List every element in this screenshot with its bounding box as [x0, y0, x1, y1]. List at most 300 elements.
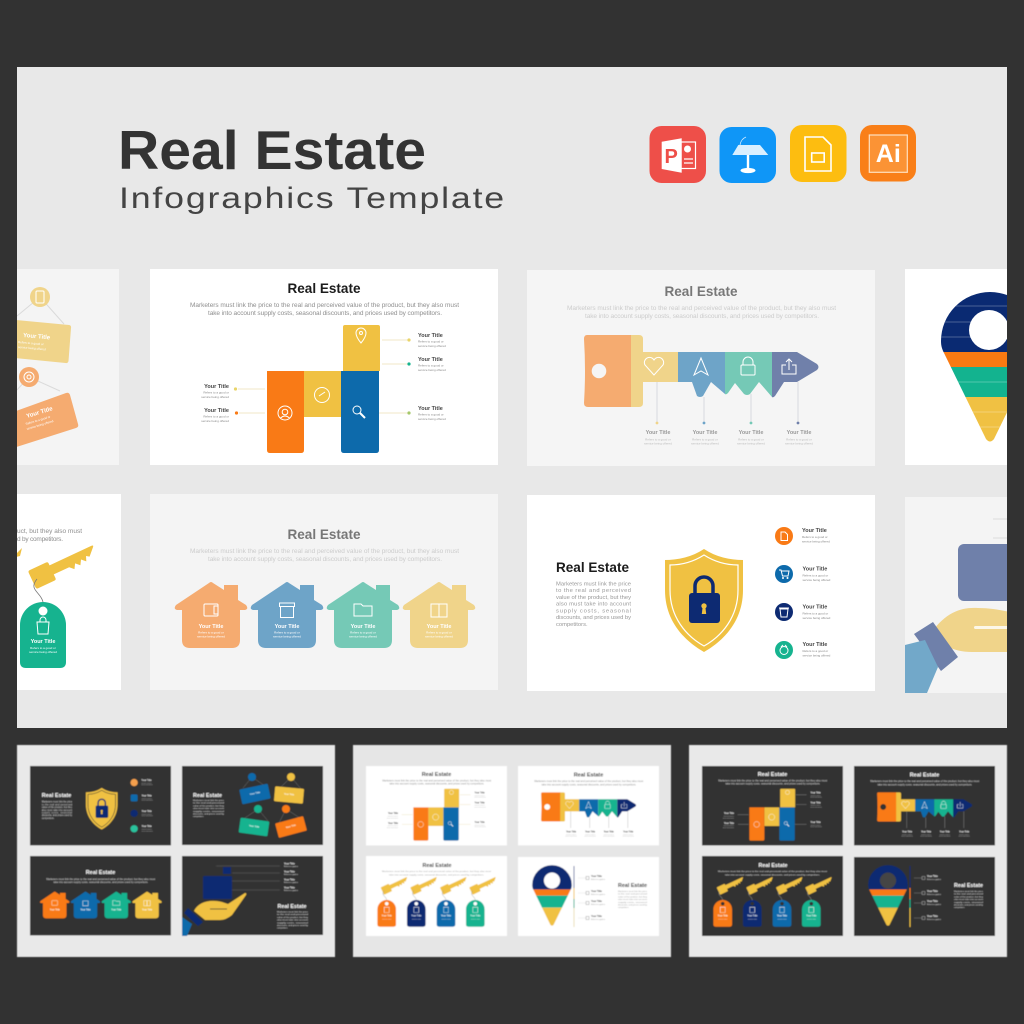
mini slide: key tags dark: take into account supply costs, seasonal discounts, and prices used by competitors.: [725, 873, 821, 876]
description: Marketers must link the price to the real and perceived value of the product, but they also must: [567, 305, 836, 312]
chart: striped pin: [941, 292, 1007, 442]
panel: dark slides group: [17, 745, 335, 957]
mini slide: pin light: supply costs, seasonal: [618, 901, 648, 904]
mini slide: key tags light: Your Title: [441, 915, 452, 918]
item: orange: Your Title: [802, 528, 827, 534]
icon: gauge: [314, 388, 330, 402]
mini slide: houses dark: take into account supply costs, seasonal discounts, and prices used by competitors.: [53, 880, 149, 884]
house: orange: [175, 582, 247, 648]
label: right middle: [418, 357, 446, 372]
mini slide: blocks light: Refers to a good or: [388, 814, 399, 817]
heading: Real Estate: [288, 280, 361, 296]
description: discounts, and prices used by: [556, 615, 631, 621]
mini slide: key dark: Your Title: [940, 830, 951, 833]
item: navy: Refers to a good or: [802, 612, 828, 616]
mini slide: shield dark: Marketers must link the price: [42, 801, 73, 804]
panel: partial slide with hanging signs: [17, 269, 119, 465]
icon: user: [278, 406, 292, 420]
sign: orange: service being offered: [26, 419, 54, 431]
key: [28, 546, 94, 588]
icon: PowerPoint: P: [664, 146, 678, 168]
mini slide: blocks light: [366, 766, 507, 845]
mini slide: blocks light: Real Estate: [422, 772, 451, 778]
item: navy: service being offered: [802, 616, 831, 620]
description fragment: d by competitors.: [17, 536, 63, 543]
mini slide: hand dark: Your Title: [284, 878, 295, 882]
mini slide: key tags dark: Refers to a good: [807, 917, 816, 920]
label: right top: Refers to a good or: [418, 340, 444, 344]
description: value of the product, but they: [556, 595, 631, 601]
mini slide: pin dark: competitors.: [954, 906, 965, 909]
mini slide: shield dark: value of the product, but they: [42, 806, 73, 809]
mini slide: blocks light: service being offered: [475, 805, 486, 808]
sign: orange: Refers to a good or: [25, 415, 51, 426]
house: orange: service being offered: [197, 634, 225, 638]
labels: Your Title: [787, 430, 811, 436]
panel: partial slide with key tag: [12, 494, 121, 690]
mini slide: key tags light: Refers to a good: [382, 917, 391, 920]
label: left top: [201, 384, 229, 399]
tag text: [29, 639, 57, 654]
description: [556, 582, 631, 628]
sign: yellow: service being offered: [18, 345, 46, 351]
mini slide: blocks dark: take into account supply costs, seasonal discounts, and prices used by competitors.: [725, 782, 821, 786]
mini slide: pin light: Marketers must link the price: [618, 890, 648, 893]
label: right middle: Your Title: [418, 357, 443, 363]
block: yellow middle: [304, 371, 341, 417]
labels: Your Title: [693, 430, 717, 436]
mini slide: key tags light: Your Title: [411, 915, 422, 918]
mini slide: key dark: Refers to a good or: [940, 833, 950, 836]
mini slide: signs dark: Marketers must link the price: [193, 799, 225, 802]
mini slide: key dark: Your Title: [902, 830, 913, 833]
labels: Your Title: [739, 430, 763, 436]
mini slide: shield dark: Your Title: [142, 810, 152, 813]
mini slide: key light: Your Title: [604, 830, 615, 833]
icon: PowerPoint: [650, 126, 706, 183]
house: teal: [327, 582, 399, 648]
mini slide: shield dark: Refers to a good or: [142, 812, 153, 815]
mini slide: houses dark: Your Title: [142, 908, 153, 911]
mini slide: houses dark: Your Title: [50, 908, 60, 911]
mini slide: hand dark: Marketers must link the price: [277, 910, 309, 914]
mini slide: pin dark: Refers to a good or: [927, 903, 941, 906]
description: supply costs, seasonal: [556, 608, 631, 614]
mini slide: hand dark: Your Title: [284, 870, 295, 874]
mini slide: hand dark: discounts, and prices used by: [277, 924, 308, 927]
mini slide: signs dark: also must take into account: [193, 807, 225, 810]
mini slide: signs dark: Your Title: [285, 824, 297, 829]
mini slide: blocks dark: Your Title: [811, 821, 821, 824]
mini slide: blocks dark: service being offered: [723, 816, 734, 819]
labels: Refers to a good or: [786, 438, 812, 442]
icon: Keynote: [720, 127, 776, 183]
mini slide: blocks dark: Marketers must link the price to the real and perceived value of the product, but they also must: [718, 778, 827, 782]
panel: partial slide with hand: [905, 497, 1007, 693]
mini slide: shield dark: Your Title: [141, 779, 152, 782]
house: yellow: Your Title: [427, 624, 451, 630]
mini slide: signs dark: competitors.: [193, 815, 204, 818]
mini slide: pin dark: Your Title: [927, 875, 938, 878]
description: Marketers must link the price to the real and perceived value of the product, but they also must: [190, 302, 459, 309]
icon: padlock: [689, 577, 720, 623]
mini slide: pin dark: Refers to a good or: [927, 878, 941, 881]
sign: orange: Your Title: [26, 406, 54, 420]
mini slide: blocks light: service being offered: [475, 825, 486, 828]
block: blue: [341, 371, 379, 453]
item: blue: [775, 565, 831, 583]
icon: lock: [741, 357, 755, 375]
mini slide: houses dark: Your Title: [80, 908, 91, 911]
mini slide: hand dark: also must take into account: [277, 919, 309, 922]
house: blue: Your Title: [275, 624, 299, 630]
mini slide: key tags dark: [702, 856, 843, 936]
mini slide: signs dark: Real Estate: [193, 793, 222, 799]
mini slide: pin dark: Marketers must link the price: [954, 890, 984, 893]
cuff: [914, 622, 958, 671]
mini slide: shield dark: discounts, and prices used by: [42, 814, 73, 817]
mini slide: blocks light: Refers to a good or: [475, 823, 485, 826]
mini slide: key tags light: Refers to a good: [442, 917, 451, 920]
labels: Your Title: [646, 430, 670, 436]
description: Marketers must link the price: [556, 582, 631, 588]
description: take into account supply costs, seasonal discounts, and prices used by competitors.: [585, 313, 819, 320]
icon: navigation: [694, 358, 708, 375]
icon: Illustrator: Ai: [876, 140, 901, 168]
mini slide: pin light: Your Title: [591, 890, 602, 893]
mini slide: blocks light: take into account supply costs, seasonal discounts, and prices used by competitors.: [389, 782, 485, 786]
mini slide: pin light: competitors.: [618, 906, 629, 909]
mini slide: key dark: [854, 766, 995, 845]
mini slide: pin dark: Refers to a good or: [927, 893, 941, 896]
mini slide: key light: Refers to a good or: [604, 833, 614, 836]
icon: previous key fragment: [17, 548, 22, 557]
mini slide: key light: service being offered: [566, 835, 577, 838]
heading: Real Estate: [556, 559, 629, 575]
mini slide: key light: take into account supply costs, seasonal discounts, and prices used by competitors.: [542, 782, 637, 786]
mini slide: pin light: also must take into account: [618, 898, 648, 901]
mini slide: key tags dark: Refers to a good: [778, 917, 787, 920]
block: orange: [267, 371, 304, 453]
mini slide: key tags dark: Refers to a good: [748, 917, 757, 920]
mini slide: blocks dark: Your Title: [724, 822, 735, 825]
item: orange: [775, 527, 830, 545]
mini slide: hand dark: competitors.: [277, 927, 288, 930]
sign: yellow: [17, 320, 72, 364]
mini slide: pin dark: Real Estate: [954, 883, 983, 889]
callout dots: [234, 338, 411, 415]
mini slide: signs dark: supply costs, seasonal: [193, 810, 225, 813]
mini slide: blocks dark: service being offered: [811, 796, 822, 799]
mini slide: blocks light: Refers to a good or: [475, 794, 485, 797]
mini slide: hand dark: to the real and perceived: [277, 913, 308, 916]
mini slide: signs dark: Your Title: [249, 824, 260, 829]
mini slide: key light: service being offered: [623, 835, 634, 838]
description: [190, 302, 459, 317]
tag hole: [38, 606, 48, 616]
mini slide: houses dark: Real Estate: [86, 870, 115, 876]
labels: service being offered: [644, 442, 672, 446]
mini slide: blocks light: Your Title: [475, 792, 485, 795]
description: to the real and perceived: [556, 588, 631, 594]
mini slide: shield dark: Refers to a good or: [142, 828, 153, 831]
mini slide: pin light: Refers to a good or: [591, 903, 605, 906]
mini slide: hand dark: Your Title: [284, 862, 295, 866]
mini slide: key dark: Refers to a good or: [959, 833, 970, 836]
mini slide: houses dark: [30, 856, 171, 935]
key tag: [20, 546, 94, 668]
mini slide: blocks dark: Refers to a good or: [811, 804, 821, 807]
label: left top: Your Title: [204, 384, 229, 390]
mini slide: pin light: [518, 857, 659, 936]
mini slide: blocks dark: service being offered: [723, 826, 734, 829]
description: competitors.: [556, 622, 588, 628]
item: green: Refers to a good or: [802, 649, 828, 653]
house: teal: service being offered: [349, 634, 377, 638]
mini slide: pin dark: supply costs, seasonal: [954, 901, 984, 904]
mini slide: signs dark: [182, 766, 323, 845]
house: yellow: [403, 582, 475, 648]
mini slide: key light: Your Title: [566, 830, 577, 833]
mini slide: key light: Your Title: [585, 830, 596, 833]
tag text: Refers to a good or: [30, 646, 56, 650]
mini slide: hand dark: Real Estate: [278, 904, 306, 910]
mini slide: key dark: service being offered: [959, 835, 970, 838]
mini slide: key light: Marketers must link the price to the real and perceived value of the product, but they also must: [534, 779, 643, 783]
house: yellow: service being offered: [425, 634, 453, 638]
house: yellow: Refers to a good or: [426, 630, 452, 634]
label: left bottom: service being offered: [201, 419, 229, 423]
mini slide: pin dark: [854, 857, 995, 936]
mini slide: key dark: Refers to a good or: [902, 833, 913, 836]
labels: service being offered: [691, 442, 719, 446]
description fragment: uct, but they also must: [17, 528, 82, 535]
sign: orange: [17, 392, 78, 447]
mini slide: signs dark: Your Title: [284, 793, 295, 797]
mini slide: key dark: Real Estate: [910, 773, 939, 779]
mini slide: hand dark: Refers to a good or: [284, 889, 298, 892]
mini slide: houses dark: Marketers must link the price to the real and perceived value of the product, but they also must: [46, 877, 155, 881]
item: blue: Refers to a good or: [802, 574, 828, 578]
mini slide: key light: Real Estate: [574, 773, 603, 779]
icon: magnifier: [353, 406, 365, 418]
mini slide: pin light: to the real and perceived: [618, 893, 647, 896]
mini slide: pin dark: Your Title: [927, 915, 938, 918]
description: also must take into account: [556, 602, 631, 608]
mini slide: pin light: Your Title: [591, 915, 602, 918]
mini slide: shield dark: Refers to a good or: [141, 781, 152, 784]
heading: Real Estate: [288, 526, 361, 542]
mini slide: key dark: service being offered: [939, 835, 951, 838]
description: Marketers must link the price to the real and perceived value of the product, but they also must: [190, 548, 459, 555]
mini slide: key dark: take into account supply costs, seasonal discounts, and prices used by competitors.: [878, 782, 973, 786]
item: orange: Refers to a good or: [802, 535, 828, 539]
block: yellow top: [343, 325, 380, 371]
icon: share: [782, 359, 796, 374]
mini slide: key dark: Your Title: [959, 830, 970, 833]
mini slide: key light: [518, 766, 659, 845]
mini slide: key tags light: Refers to a good: [471, 917, 480, 920]
labels: service being offered: [737, 442, 765, 446]
mini slide: pin dark: value of the product, but they: [954, 895, 983, 898]
mini slide: key tags light: Your Title: [382, 915, 392, 918]
panel: light slides group: [353, 745, 671, 957]
mini slide: blocks dark: Your Title: [724, 812, 735, 815]
arm: [905, 640, 938, 693]
mini slide: blocks light: Refers to a good or: [388, 824, 399, 827]
mini slide: shield dark: supply costs, seasonal: [42, 811, 73, 814]
labels: [644, 430, 813, 446]
tag text: service being offered: [29, 650, 57, 654]
label: right bottom: [418, 406, 446, 421]
label: right bottom: service being offered: [418, 417, 446, 421]
house: blue: service being offered: [273, 634, 301, 638]
mini slide: blocks light: Marketers must link the price to the real and perceived value of the product, but they also must: [382, 778, 491, 782]
mini slide: key light: service being offered: [585, 835, 596, 838]
mini slide: blocks dark: service being offered: [811, 825, 822, 828]
labels: Refers to a good or: [692, 438, 718, 442]
mini slide: key tags light: Real Estate: [422, 863, 452, 869]
description: [567, 305, 836, 320]
mini slide: key dark: Marketers must link the price to the real and perceived value of the product, but they also must: [870, 779, 979, 783]
mini slide: houses dark: Your Title: [111, 908, 122, 911]
mini slide: pin light: discounts, and prices used by: [618, 904, 647, 906]
mini slide: signs dark: to the real and perceived: [193, 802, 224, 805]
description: [190, 548, 459, 563]
icon: Illustrator: [860, 125, 916, 182]
callout dots: [656, 422, 799, 424]
mini slide: key light: Refers to a good or: [566, 833, 577, 836]
heading: Real Estate: [664, 283, 738, 299]
string: [34, 579, 43, 602]
mini slide: blocks dark: Refers to a good or: [811, 823, 821, 826]
mini slide: pin light: value of the product, but they: [618, 895, 647, 898]
label: right bottom: Refers to a good or: [418, 412, 444, 416]
mini slide: blocks dark: Refers to a good or: [724, 824, 735, 827]
mini slide: pin dark: Refers to a good or: [927, 918, 941, 921]
mini slide: shield dark: Your Title: [142, 825, 152, 828]
mini slide: shield dark: Refers to a good or: [142, 797, 153, 800]
mini slide: key tags dark: Marketers must link the price to the real and perceived value of the product, but they also must: [718, 870, 828, 873]
labels: Refers to a good or: [645, 438, 671, 442]
key: head: [584, 335, 632, 407]
shield: [665, 549, 743, 652]
panel: slide with shield: [527, 495, 875, 691]
mini slide: key light: service being offered: [603, 835, 615, 838]
mini slide: shield dark: service being offered: [142, 799, 153, 802]
sign: yellow: Your Title: [23, 333, 51, 341]
mini slide: blocks light: Refers to a good or: [475, 804, 485, 807]
mini slide: blocks light: Your Title: [388, 812, 399, 815]
label: left top: service being offered: [201, 395, 229, 399]
mini slide: blocks dark: [702, 766, 843, 845]
panel: partial slide with map pin: [905, 269, 1007, 465]
mini slide: signs dark: discounts, and prices used by: [193, 812, 224, 816]
mini slide: key dark: Your Title: [921, 830, 932, 833]
mini slide: shield dark: to the real and perceived: [42, 803, 73, 806]
labels: Refers to a good or: [738, 438, 764, 442]
tag body: [20, 602, 66, 668]
house: blue: Refers to a good or: [274, 630, 300, 634]
panel: slide with key (faded): [527, 270, 875, 466]
mini slide: pin dark: Your Title: [927, 900, 938, 903]
mini slide: blocks dark: Refers to a good or: [724, 814, 735, 817]
label: right top: Your Title: [418, 333, 443, 339]
key: teal tooth: [725, 352, 772, 397]
mini slide: key light: Refers to a good or: [623, 833, 634, 836]
label: right middle: Refers to a good or: [418, 364, 444, 368]
icon: document circle: [30, 287, 50, 307]
mini slide: key tags dark: Your Title: [777, 915, 788, 918]
mini slide: blocks light: service being offered: [387, 816, 398, 819]
key: blue tooth: [678, 352, 725, 397]
mini slide: blocks light: Your Title: [475, 801, 485, 804]
description: take into account supply costs, seasonal discounts, and prices used by competitors.: [208, 556, 442, 563]
mini slide: key dark: service being offered: [921, 835, 932, 838]
hand: [932, 608, 1010, 652]
panel: slide with houses (faded): [150, 494, 498, 690]
mini slide: hand dark: Your Title: [284, 886, 295, 890]
item: navy: Your Title: [802, 604, 827, 610]
mini slide: blocks dark: Your Title: [811, 792, 821, 795]
mini slide: shield dark: Real Estate: [42, 793, 71, 799]
mini slide: key tags light: Marketers must link the price to the real and perceived value of the product, but they also must: [382, 870, 492, 873]
mini slide: key tags light: Your Title: [470, 915, 481, 918]
item: blue: Your Title: [802, 566, 827, 572]
mini slide: blocks light: Your Title: [388, 822, 399, 825]
item: green: service being offered: [802, 653, 831, 657]
item: orange: service being offered: [802, 539, 830, 543]
label: left top: Refers to a good or: [203, 390, 229, 394]
item: navy: [775, 603, 831, 621]
mini slide: hand dark: Refers to a good or: [284, 873, 298, 876]
mini slide: blocks light: Your Title: [475, 821, 485, 824]
labels: service being offered: [785, 442, 813, 446]
mini slide: signs dark: Your Title: [250, 791, 261, 796]
mini slide: hand dark: [182, 856, 323, 936]
mini slide: pin light: Your Title: [591, 875, 602, 878]
label: left bottom: [201, 408, 229, 423]
mini slide: blocks dark: service being offered: [811, 805, 822, 808]
mini slide: key dark: Refers to a good or: [921, 833, 932, 836]
house: orange: Refers to a good or: [198, 630, 224, 634]
house: teal: Your Title: [351, 624, 375, 630]
key: yellow shaft: [631, 335, 678, 407]
label: right top: service being offered: [418, 344, 446, 348]
box held by hand: [958, 544, 1007, 601]
mini slide: hand dark: supply costs, seasonal: [277, 921, 309, 924]
mini slide: hand dark: Refers to a good or: [284, 865, 298, 868]
house: blue: [251, 582, 323, 648]
icon: location pin: [356, 328, 366, 343]
mini slide: key tags dark: Your Title: [747, 915, 758, 918]
sign: yellow: Refers to a good or: [18, 340, 44, 346]
mini slide: key tags dark: Real Estate: [758, 863, 788, 869]
mini slide: key tags dark: Refers to a good: [718, 917, 727, 920]
mini slide: key tags light: take into account supply costs, seasonal discounts, and prices used by competitors.: [389, 873, 485, 876]
label: left bottom: Your Title: [204, 408, 229, 414]
mini slide: pin dark: Your Title: [927, 890, 938, 893]
mini slide: key dark: service being offered: [902, 835, 913, 838]
mini slide: shield dark: Your Title: [142, 795, 152, 798]
mini slide: shield dark: service being offered: [142, 814, 153, 817]
label: left bottom: Refers to a good or: [203, 414, 229, 418]
description fragment: [17, 528, 82, 543]
key: hole: [592, 364, 606, 378]
icon: heart: [644, 357, 664, 375]
mini slide: pin dark: also must take into account: [954, 898, 984, 901]
label: right middle: service being offered: [418, 368, 446, 372]
